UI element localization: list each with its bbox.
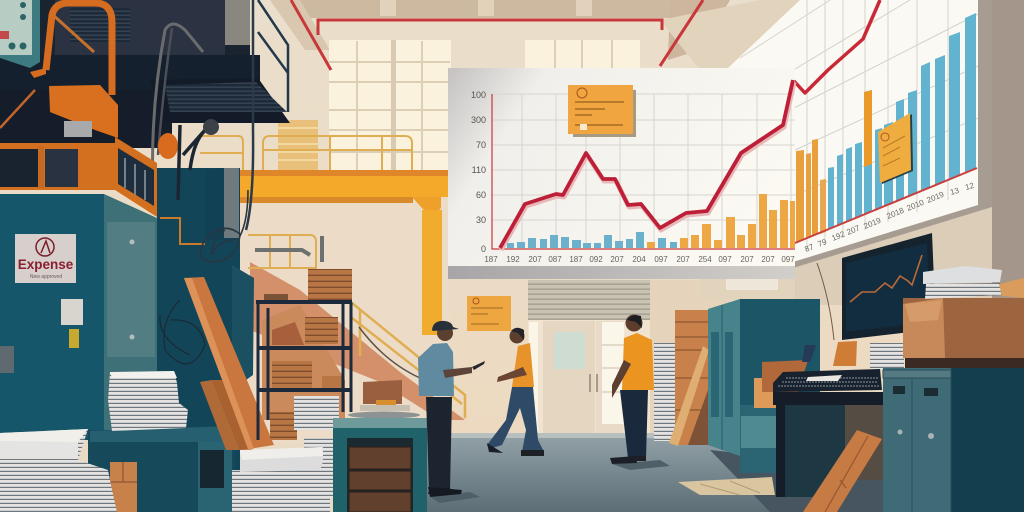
x-axis labels: 207 — [528, 255, 542, 264]
small planks — [200, 380, 252, 450]
red line — [500, 80, 794, 250]
yellow mezzanine beam — [232, 170, 448, 335]
wall board axis labels: 2019 — [862, 216, 883, 231]
teal locker — [708, 299, 820, 456]
paper stack on bench — [108, 371, 188, 431]
paper stacks centre — [232, 396, 339, 512]
x-axis labels: 192 — [506, 255, 520, 264]
leaning plank right — [803, 430, 882, 512]
wall board axis labels: 87 — [803, 242, 816, 254]
blue and orange bars — [507, 194, 795, 248]
worker with phone — [418, 321, 485, 497]
expense sign: Expense — [18, 257, 74, 272]
x-axis labels: 207 — [740, 255, 754, 264]
wall board axis labels — [803, 181, 976, 254]
shutter and door — [528, 280, 650, 434]
wall board axis labels: 2010 — [905, 198, 926, 213]
chart on big wall board — [728, 0, 978, 268]
wall board axis labels: 2019 — [925, 190, 946, 205]
windows — [329, 40, 640, 171]
wall board axis labels: 2018 — [885, 206, 906, 221]
walking worker in orange — [487, 328, 544, 456]
x-axis labels: 207 — [676, 255, 690, 264]
x-axis labels: 187 — [484, 255, 498, 264]
desk with keyboard — [773, 369, 883, 497]
x-axis labels: 092 — [589, 255, 603, 264]
x-axis labels — [484, 255, 795, 264]
low shelf and box — [740, 345, 816, 473]
orange frame with arch — [0, 3, 157, 217]
mezzanine railing and stack — [200, 120, 412, 170]
x-axis labels: 207 — [761, 255, 775, 264]
main teal cabinet — [0, 194, 157, 440]
sticky note — [568, 85, 636, 137]
wall notice — [467, 296, 511, 331]
wall board axis labels: 192 — [830, 229, 847, 243]
x-axis labels: 087 — [548, 255, 562, 264]
dark machinery rear — [157, 168, 254, 512]
large leaning plank — [184, 277, 274, 449]
red ceiling pipes — [291, 0, 703, 70]
shelving rack — [256, 269, 352, 440]
right wall shelf edge — [726, 279, 778, 290]
centre table — [333, 380, 427, 512]
wall board note — [878, 113, 913, 184]
main line and bar chart — [448, 68, 795, 279]
overhead machine — [0, 0, 290, 230]
wall board axis labels: 12 — [964, 181, 976, 192]
y-axis labels: 30 — [476, 215, 486, 225]
x-axis labels: 254 — [698, 255, 712, 264]
y-axis labels: 300 — [471, 115, 486, 125]
wall board axis labels: 13 — [949, 186, 961, 197]
board frame and pillar — [793, 0, 1024, 300]
standing worker in orange — [610, 314, 654, 464]
x-axis labels: 097 — [654, 255, 668, 264]
paper stack on box — [923, 266, 1024, 299]
staircase — [248, 235, 465, 420]
paper stack bottom left — [0, 429, 117, 512]
wall cable — [817, 263, 834, 340]
items behind desk — [833, 341, 904, 369]
expense sign: New approved — [30, 274, 62, 280]
wood pile and papers by locker — [654, 310, 709, 446]
wall board axis labels: 79 — [816, 237, 829, 249]
cardboard box on pallet — [903, 298, 1024, 368]
wall board axis labels: 207 — [845, 223, 862, 237]
teal bench — [88, 426, 235, 512]
y-axis labels: 70 — [476, 140, 486, 150]
cabinet labels — [61, 299, 83, 348]
y-axis labels — [471, 90, 486, 254]
expense sign — [15, 234, 76, 283]
wall board red line — [790, 0, 880, 93]
bars on wall board — [796, 13, 976, 243]
x-axis labels: 187 — [569, 255, 583, 264]
cables and hanging lamp — [152, 24, 248, 364]
y-axis labels: 0 — [481, 244, 486, 254]
y-axis labels: 100 — [471, 90, 486, 100]
y-axis labels: 60 — [476, 190, 486, 200]
floor — [427, 433, 895, 512]
right cabinet — [883, 368, 1024, 512]
control panel — [0, 0, 40, 68]
monitor — [842, 233, 936, 340]
x-axis labels: 204 — [632, 255, 646, 264]
x-axis labels: 207 — [610, 255, 624, 264]
x-axis labels: 097 — [781, 255, 795, 264]
x-axis labels: 097 — [718, 255, 732, 264]
y-axis labels: 110 — [472, 165, 486, 175]
